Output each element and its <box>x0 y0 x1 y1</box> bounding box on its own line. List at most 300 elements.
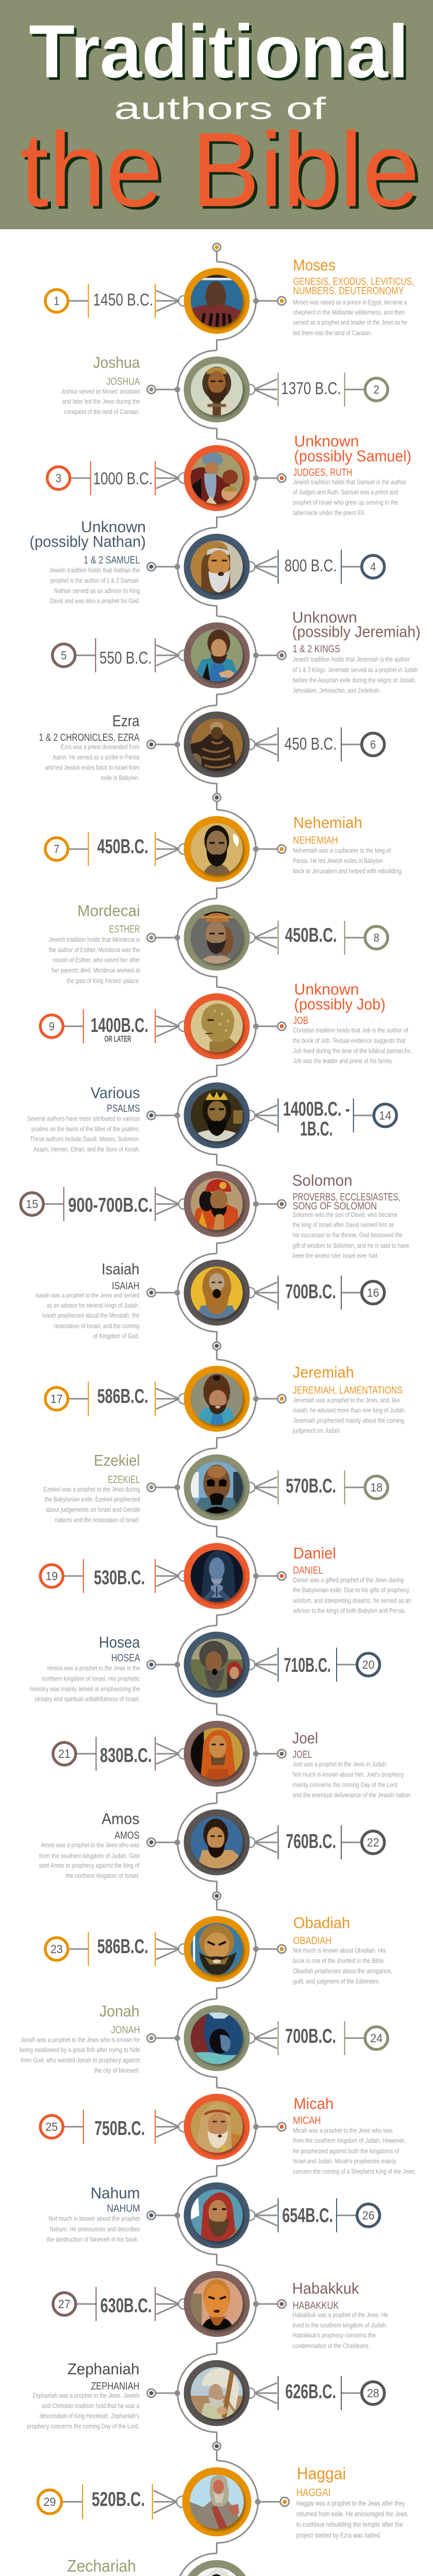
date marker: 586B.C.: 17 <box>51 1392 63 1405</box>
date marker: 750B.C.: 750B.C. <box>94 2117 145 2140</box>
description: Joshua served as Moses' assistant <box>61 387 140 395</box>
date marker: 1400B.C. - 1B.C. <box>244 1098 396 1140</box>
name: Isaiah <box>102 1260 139 1278</box>
side connector <box>147 2034 180 2042</box>
description: Jewish tradition holds that Nathan the <box>49 566 140 574</box>
description: Israel and Judah. Micah's prophecies mainly <box>293 2157 396 2165</box>
portrait: Haggai <box>182 2467 252 2536</box>
description: idolatry and spiritual unfaithfulness of Israel. <box>35 1695 140 1703</box>
side connector <box>147 1289 180 1297</box>
panel: Amos <box>39 1803 385 1892</box>
name <box>294 980 386 1013</box>
side connector <box>147 2389 180 2397</box>
name: Hosea <box>99 1633 140 1651</box>
books: PSALMS <box>107 1103 140 1114</box>
date marker: 700B.C.: 700B.C. <box>285 1281 336 1303</box>
description: cousin of Esther, who raised her after <box>53 956 140 964</box>
description: being swallowed by a great fish after trying to hide <box>20 2046 140 2054</box>
date marker: 760B.C.: 22 <box>367 1836 379 1849</box>
name: Joshua <box>93 353 140 371</box>
date marker: 1400B.C. or later: 9 <box>49 1020 55 1033</box>
panel: Joshua <box>61 350 388 439</box>
side connector <box>253 1572 286 1580</box>
name: Joel <box>292 1729 318 1747</box>
books: DANIEL <box>293 1565 323 1576</box>
date marker: 750B.C.: 25 <box>45 2120 58 2133</box>
description: to continue rebuilding the temple after the <box>296 2520 403 2529</box>
date marker: 530B.C.: 19 <box>45 1569 58 1583</box>
description: condemnation of the Chaldeans. <box>293 2342 370 2349</box>
date marker: 630B.C.: 27 <box>58 2297 71 2311</box>
books: JOEL <box>293 1749 312 1760</box>
panel: Nahum <box>46 2176 380 2265</box>
name: Obadiah <box>293 1913 350 1931</box>
date marker: 800 B.C.: 800 B.C. <box>285 556 337 575</box>
date marker: 570B.C.: 570B.C. <box>286 1475 336 1497</box>
name: Various <box>91 1083 140 1101</box>
portrait: Ezra <box>184 711 249 777</box>
description: Daniel was a gifted prophet of the Jews during <box>293 1576 404 1584</box>
side connector <box>147 1838 180 1846</box>
timeline arc <box>216 2088 256 2176</box>
description: Hosea was a prophet to the Jews in the <box>47 1664 140 1672</box>
portrait: Moses <box>184 268 249 334</box>
timeline arc <box>177 1448 216 1537</box>
books <box>293 1192 401 1212</box>
timeline arc <box>216 1537 256 1625</box>
description <box>293 298 407 337</box>
side connector <box>253 1945 286 1953</box>
panel: Nehemiah <box>45 810 403 899</box>
date marker: 626B.C.: 28 <box>367 2386 379 2400</box>
panel: Micah <box>40 2088 416 2176</box>
panel: Jeremiah <box>45 1360 406 1448</box>
name: Zechariah <box>67 2556 136 2575</box>
portrait: Jeremiah <box>184 622 249 688</box>
books: OBADIAH <box>293 1935 331 1946</box>
description: her parents died. Mordecai worked at <box>52 967 140 974</box>
date marker: 626B.C. <box>244 2376 385 2410</box>
description: the northern kingdom of Israel. <box>66 1872 139 1879</box>
portrait: Amos <box>184 1809 249 1875</box>
date marker: 1370 B.C.: 2 <box>374 383 379 396</box>
books: ISAIAH <box>112 1281 139 1292</box>
date marker: 1000 B.C. <box>47 461 189 495</box>
panel: Mordecai <box>48 899 388 987</box>
description: he prophesied against both the kingdoms of <box>293 2147 399 2155</box>
portrait: Habakkuk <box>184 2271 249 2337</box>
date marker: 760B.C. <box>244 1825 385 1859</box>
description <box>48 936 140 985</box>
date marker: 450B.C.: 450B.C. <box>285 924 337 946</box>
description <box>293 2311 388 2349</box>
portrait: Ezekiel <box>184 1454 249 1520</box>
side connector <box>253 1750 286 1758</box>
description: sent Amos to prophecy against the king of <box>39 1861 140 1869</box>
date marker: 450 B.C.: 450 B.C. <box>285 734 337 753</box>
date marker: 450B.C. <box>244 921 388 955</box>
name: Solomon <box>292 1171 353 1189</box>
timeline arc <box>216 2265 256 2354</box>
description: These authors include David, Moses, Solomon, <box>30 1135 140 1143</box>
header banner <box>0 0 433 231</box>
title: Traditional authors of the Bible: authors of <box>114 91 326 126</box>
description <box>293 1946 392 1985</box>
panel: Zechariah <box>22 2553 395 2576</box>
description <box>293 2127 416 2175</box>
timeline arc <box>216 616 256 705</box>
name <box>294 432 411 465</box>
description: Not much is known about the prophet <box>48 2215 140 2223</box>
date marker: 654B.C.: 26 <box>362 2209 375 2222</box>
panel: Unknown (possibly Nathan) <box>29 518 385 616</box>
description: book is one of the shortest in the Bible. <box>293 1957 385 1964</box>
date marker: 630B.C. <box>53 2287 189 2321</box>
description <box>293 1026 412 1065</box>
description: Christian tradition holds that Job is the author of <box>293 1026 408 1034</box>
timeline arc <box>177 350 216 439</box>
description: mainly concerns the coming Day of the Lord <box>293 1781 397 1788</box>
description: judgment on Judah. <box>293 1427 341 1434</box>
description: Job was the leader and priest of his family. <box>293 1057 393 1065</box>
description: conquest of the land of Canaan. <box>64 408 140 416</box>
description: Jonah was a prophet to the Jews who is known for <box>21 2036 140 2044</box>
portrait: Zephaniah <box>184 2360 249 2426</box>
description <box>293 1396 406 1434</box>
description <box>20 2036 140 2074</box>
date marker: 900-700B.C.: 900-700B.C. <box>68 1194 153 1216</box>
description: the destruction of Nineveh in his book. <box>46 2235 139 2243</box>
side connector <box>253 845 286 853</box>
name: Unknown <box>294 980 359 998</box>
timeline arc <box>216 1715 256 1803</box>
name: Unknown <box>292 608 357 626</box>
description <box>46 2215 140 2243</box>
description: about judgements on Israel and Gentile <box>46 1506 140 1514</box>
books: NEHEMIAH <box>293 835 338 846</box>
date marker: 830B.C.: 830B.C. <box>100 1744 152 1767</box>
description: the book of Job. Textual evidence suggests that <box>293 1037 406 1044</box>
title: Traditional authors of the Bible: the Bible <box>20 111 420 229</box>
description: of Kingdom of God. <box>93 1332 139 1340</box>
date marker: 450B.C.: 450B.C. <box>97 836 148 858</box>
timeline arc <box>177 528 216 616</box>
books: MICAH <box>293 2115 321 2126</box>
portrait: Joel <box>184 1721 249 1787</box>
portrait: Jeremiah <box>184 1366 249 1432</box>
description <box>293 1576 411 1615</box>
description: Haggai was a prophet to the Jews after they <box>296 2500 405 2507</box>
name: Zephaniah <box>68 2360 139 2378</box>
date marker: 700B.C.: 700B.C. <box>285 2025 336 2047</box>
books: HOSEA <box>111 1652 140 1664</box>
timeline arc <box>175 2553 216 2576</box>
panel: Joel <box>53 1715 412 1803</box>
date marker: 1370 B.C.: 1370 B.C. <box>281 379 341 398</box>
description <box>39 1841 140 1879</box>
description: ministry was mainly aimed at emphasizing the <box>30 1685 140 1692</box>
timeline arc <box>216 1910 256 1999</box>
date marker: 1450 B.C.: 1450 B.C. <box>93 290 153 309</box>
section: Haggai to Luke <box>22 2461 413 2576</box>
date marker: 900-700B.C.: 15 <box>26 1197 38 1211</box>
timeline arc <box>177 1803 216 1892</box>
description: Amos was a prophet to the Jews who was <box>41 1841 140 1849</box>
timeline arc <box>177 2176 216 2265</box>
date marker: 1000 B.C.: 3 <box>56 471 61 485</box>
description: Zephaniah was a prophet to the Jews. Jewish <box>32 2392 140 2399</box>
books <box>293 276 414 297</box>
description: Isaiah prophecied about the Messiah, the <box>42 1312 140 1319</box>
date marker: 750B.C. <box>40 2110 189 2144</box>
books: HABAKKUK <box>293 2300 339 2311</box>
timeline arc <box>177 705 216 793</box>
books: ZEPHANIAH <box>91 2381 139 2392</box>
description: Asaph, Heman, Ethan, and the Sons of Korah. <box>34 1145 140 1153</box>
date marker: 520B.C.: 520B.C. <box>92 2488 145 2511</box>
name <box>29 518 146 550</box>
description: of Judges and Ruth. Samuel was a priest and <box>293 488 398 496</box>
title: Traditional authors of the Bible <box>20 9 423 231</box>
date marker: 586B.C. <box>45 1382 189 1416</box>
books: 1 & 2 CHRONICLES, EZRA <box>39 732 140 743</box>
side connector <box>253 2300 286 2308</box>
side connector <box>147 740 180 749</box>
description: Jehoiakim, Jehoiachin, and Zedekiah. <box>293 686 381 694</box>
name: Micah <box>294 2095 334 2113</box>
panel: Solomon <box>21 1165 409 1260</box>
side connector <box>253 1022 286 1030</box>
title: Traditional authors of the Bible: Traditional <box>31 12 411 96</box>
side connector <box>147 563 180 571</box>
description: the city of Nineveh. <box>94 2066 140 2074</box>
description: David and was also a prophet for God. <box>49 597 140 605</box>
description <box>293 655 418 694</box>
description: descendant of King Hezekiah. Zephaniah's <box>40 2412 140 2419</box>
description: Habakkuk's prophecy concerns the <box>293 2331 376 2339</box>
portrait: Micah <box>184 2094 249 2160</box>
description: Persia. He led Jewish exiles in Babylon <box>293 857 382 865</box>
description: Solomon was the son of David, who became <box>293 1211 397 1218</box>
name: (possibly Jeremiah) <box>292 623 421 641</box>
description: back to Jerusalem and helped with rebuilding. <box>293 867 403 875</box>
description: Not much is known about him. Joel's prophecy <box>293 1770 404 1778</box>
books: 1 & 2 KINGS <box>293 643 340 655</box>
date marker: 700B.C.: 24 <box>370 2031 382 2045</box>
description: Several authors have been attributed to various <box>27 1114 140 1122</box>
timeline arc <box>177 1999 216 2088</box>
portrait: Daniel <box>184 1543 249 1609</box>
timeline arc <box>216 439 256 528</box>
name: (possibly Nathan) <box>29 533 146 550</box>
side connector <box>253 297 286 305</box>
description: Nathan served as an advisor to King <box>54 587 140 595</box>
description: from God, who wanted Jonah to prophecy against <box>21 2056 140 2064</box>
date marker: 520B.C. <box>38 2484 188 2519</box>
side connector <box>253 1200 286 1208</box>
books: JEREMIAH, LAMENTATIONS <box>293 1385 403 1396</box>
description <box>36 1291 139 1340</box>
portrait: Samuel <box>184 445 249 511</box>
date marker: 900-700B.C. <box>21 1187 189 1221</box>
books: PROVERBS, ECCLESIASTES, <box>293 1192 401 1203</box>
description: advisor to the kings of both Babylon and Persia. <box>293 1606 406 1615</box>
date marker: 530B.C.: 530B.C. <box>94 1567 145 1589</box>
timeline arc <box>216 810 256 899</box>
description <box>43 1485 140 1524</box>
description: Isaiah, he advised more than one king of Judah. <box>293 1406 406 1414</box>
portrait: Jonah <box>184 2005 249 2071</box>
date marker: 700B.C.: 16 <box>367 1286 379 1299</box>
date marker: 700B.C. <box>244 2021 388 2055</box>
name: Ezekiel <box>94 1451 140 1469</box>
description: Not much is known about Obadiah. His <box>293 1946 386 1954</box>
title: Traditional authors of the Bible: Traditional <box>29 9 409 93</box>
date marker: 570B.C.: 18 <box>370 1481 382 1494</box>
portrait: Obadiah <box>184 1916 249 1982</box>
panel: Various <box>27 1076 396 1165</box>
portrait: Nahum <box>184 2182 249 2248</box>
date marker: 1400B.C. - 1B.C.: 14 <box>379 1109 391 1122</box>
portrait: Nehemiah <box>184 816 249 882</box>
date marker: 710B.C.: 710B.C. <box>284 1654 331 1676</box>
date marker: 550 B.C.: 5 <box>61 649 66 662</box>
date marker: 1400B.C. or later <box>40 1009 189 1044</box>
date marker: 800 B.C.: 4 <box>370 560 376 573</box>
portrait: Mordecai <box>184 905 249 971</box>
timeline arc <box>177 1076 216 1165</box>
side connector <box>255 2498 289 2506</box>
books: EZEKIEL <box>108 1474 140 1485</box>
timeline node <box>213 2442 221 2461</box>
description: from the southern kingdom of Judah. God <box>39 1852 139 1860</box>
description <box>293 846 403 875</box>
name: (possibly Job) <box>294 995 386 1013</box>
timeline start node <box>213 243 221 262</box>
date marker: 586B.C.: 586B.C. <box>97 1936 148 1958</box>
description <box>27 2392 140 2430</box>
date marker: 710B.C.: 20 <box>362 1658 375 1671</box>
date marker: 1400B.C. or later: 1400B.C. <box>91 1014 148 1037</box>
name: Haggai <box>297 2464 346 2483</box>
side connector <box>253 2123 286 2131</box>
description: tabernacle under the priest Eli. <box>293 509 365 516</box>
date marker: 586B.C. <box>45 1932 189 1966</box>
description: as an advisor for several kings of Judah. <box>46 1301 139 1309</box>
portrait: Job <box>184 993 249 1059</box>
timeline arc <box>216 1165 256 1253</box>
date marker: 450 B.C. <box>244 727 385 761</box>
panel: Ezekiel <box>43 1448 388 1537</box>
timeline arc <box>177 1253 216 1342</box>
description: and led Jewish exiles back to Israel from <box>45 764 139 771</box>
date marker: 586B.C.: 23 <box>51 1942 63 1956</box>
panel: Moses <box>45 256 414 350</box>
timeline arc <box>216 1360 256 1448</box>
date marker: 830B.C. <box>53 1737 189 1771</box>
date marker: 450B.C.: 8 <box>374 931 379 944</box>
description: northern kingdom of Israel. His prophetic <box>42 1674 140 1683</box>
date marker: 586B.C.: 586B.C. <box>97 1385 148 1408</box>
panel: Hosea <box>30 1625 380 1715</box>
date marker: 1400B.C. - 1B.C.: 1400B.C. - <box>283 1098 350 1120</box>
date marker: 520B.C.: 29 <box>43 2495 56 2509</box>
description: Joel was a prophet to the Jews in Judah. <box>293 1760 388 1768</box>
name: Moses <box>293 256 336 274</box>
description: his successor to the throne. God bestowed the <box>293 1231 402 1239</box>
date marker: 550 B.C.: 550 B.C. <box>99 648 152 667</box>
description: Micah was a prophet to the Jews who was <box>293 2127 393 2134</box>
portrait: Zechariah <box>182 2560 252 2576</box>
name: Unknown <box>294 432 359 450</box>
date marker: 530B.C. <box>40 1559 189 1593</box>
description: Nehemiah was a cupbearer to the king of <box>293 846 391 854</box>
description: Nahum. He pronounces and describes <box>49 2225 140 2233</box>
panel: Unknown (possibly Job) <box>40 980 412 1076</box>
name: Ezra <box>112 711 140 730</box>
portrait: Solomon <box>184 1171 249 1237</box>
portrait: Joshua <box>184 357 249 422</box>
title: Traditional authors of the Bible: the Bible <box>23 113 423 231</box>
date marker: 450B.C.: 7 <box>54 842 59 856</box>
name: Jonah <box>99 2002 140 2020</box>
timeline arc <box>216 262 256 350</box>
timeline node <box>213 1892 221 1910</box>
name <box>292 608 421 641</box>
timeline arc <box>177 899 216 987</box>
date marker: 654B.C. <box>244 2198 380 2232</box>
panel: Obadiah <box>45 1910 392 1999</box>
description: Isaiah was a prophet to the Jews and served <box>36 1291 139 1299</box>
side connector <box>147 1483 180 1492</box>
date marker: 830B.C.: 21 <box>58 1747 71 1760</box>
portrait: David <box>184 1082 249 1148</box>
side connector <box>147 1660 180 1669</box>
books: JOB <box>293 1015 308 1026</box>
panel: Ezra <box>39 705 385 793</box>
books: NAHUM <box>107 2203 140 2214</box>
description: returned from exile. He encouraged the Jews <box>296 2510 408 2518</box>
description <box>293 1211 409 1260</box>
books: JONAH <box>111 2024 140 2036</box>
panel: Unknown (possibly Jeremiah) <box>53 608 421 705</box>
date marker: 710B.C. <box>244 1648 380 1682</box>
date marker: 626B.C.: 626B.C. <box>285 2381 336 2403</box>
name: Nahum <box>91 2184 140 2202</box>
description: Jeremiah prophecied mainly about the coming <box>293 1416 404 1424</box>
name: (possibly Samuel) <box>294 447 411 465</box>
description <box>296 2500 408 2539</box>
books: SONG OF SOLOMON <box>293 1200 377 1212</box>
description: been the wisest ruler Israel ever had. <box>293 1252 379 1260</box>
date marker: 1370 B.C. <box>244 372 388 406</box>
date marker: 760B.C.: 760B.C. <box>286 1831 336 1853</box>
timeline arc <box>177 2354 216 2442</box>
panel: Isaiah <box>36 1253 385 1342</box>
description: Ezra was a priest descended from <box>61 743 140 751</box>
timeline node <box>213 1342 221 1360</box>
side connector <box>147 2211 180 2219</box>
description: and Christian tradition hold that he was a <box>42 2402 140 2410</box>
side connector <box>147 1111 180 1120</box>
description: the gate of King Xerxes' palace. <box>67 977 140 985</box>
side connector <box>147 934 180 942</box>
date marker: 700B.C. <box>244 1276 385 1310</box>
side connector <box>147 385 180 394</box>
timeline node <box>213 793 221 810</box>
date marker: 550 B.C. <box>53 638 189 672</box>
description: Habakkuk was a prophet of the Jews. He <box>293 2311 388 2318</box>
